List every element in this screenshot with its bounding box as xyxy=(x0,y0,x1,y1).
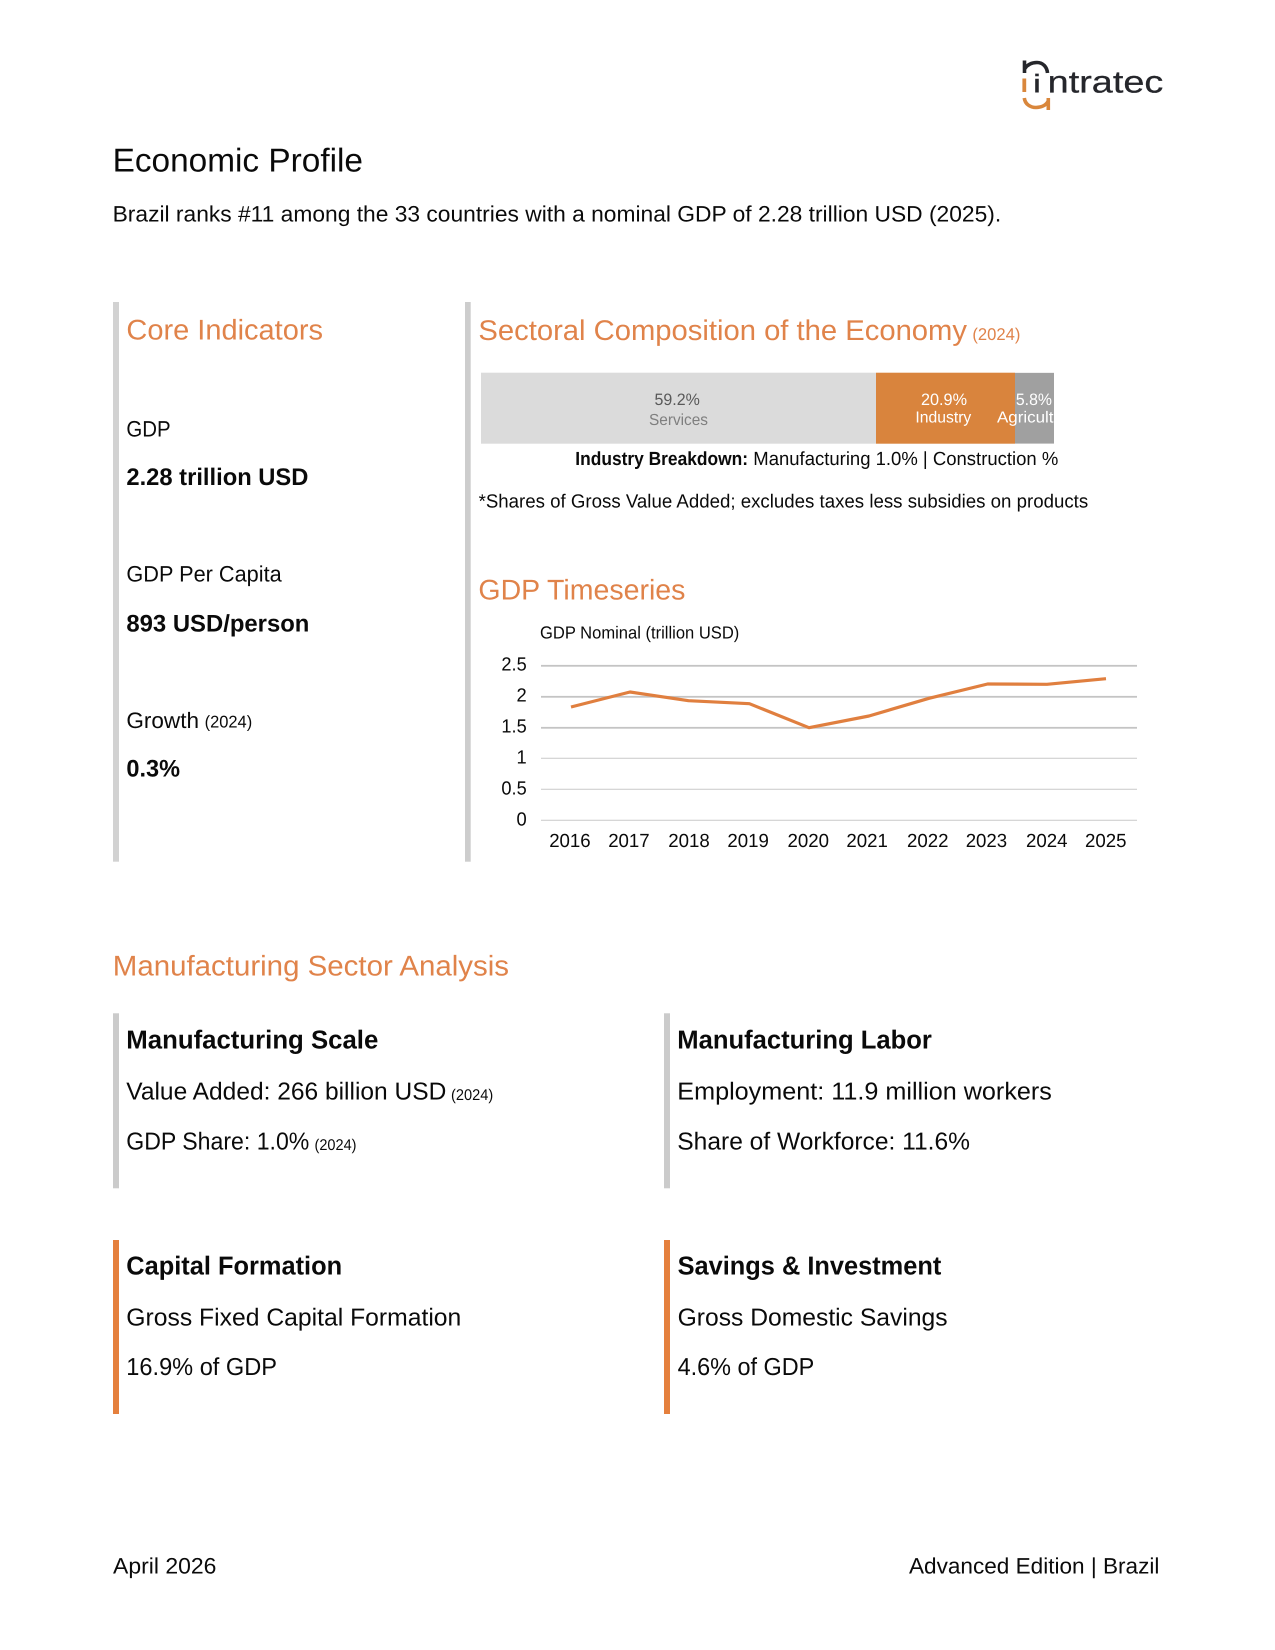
panel: manufacturing scale xyxy=(113,1013,493,1188)
y axis labels xyxy=(501,654,527,831)
segment: services: 59.2% xyxy=(654,391,700,409)
indicator: growth: Growth xyxy=(126,708,199,733)
indicator: GDP per capita: GDP Per Capita xyxy=(126,562,282,586)
panel: capital formation: 16.9% of GDP xyxy=(126,1354,277,1381)
heading: manufacturing sector analysis: Manufacturing Sector Analysis xyxy=(113,951,509,983)
logo: intratec: i xyxy=(1033,68,1041,98)
y axis labels: 0 xyxy=(516,810,527,831)
segment: agriculture: 5.8% xyxy=(1016,391,1052,409)
y axis labels: 0.5 xyxy=(501,778,527,799)
x axis labels xyxy=(549,831,1126,852)
heading: sectoral composition: Sectoral Composition of the Economy xyxy=(478,315,968,347)
heading: GDP timeseries: GDP Timeseries xyxy=(478,574,685,606)
y axis labels: 1.5 xyxy=(501,717,527,738)
industry breakdown text: Industry Breakdown: xyxy=(575,449,748,470)
panel: savings and investment: 4.6% of GDP xyxy=(678,1354,814,1381)
x axis labels: 2016 xyxy=(549,831,591,852)
panel: capital formation xyxy=(113,1240,461,1414)
panel: right column divider xyxy=(465,302,471,862)
segment: services: Services xyxy=(649,412,708,429)
industry breakdown text xyxy=(575,449,1058,470)
panel: manufacturing labor: Employment: 11.9 million workers xyxy=(677,1078,1052,1105)
x axis labels: 2020 xyxy=(788,831,829,852)
y axis labels: 1 xyxy=(516,747,527,768)
segment: industry: Industry xyxy=(915,410,971,427)
panel: manufacturing labor: Share of Workforce: 11.6% xyxy=(677,1129,970,1156)
panel: capital formation: Gross Fixed Capital Formation xyxy=(126,1304,461,1331)
segment: industry xyxy=(876,373,1015,444)
y axis labels: 2 xyxy=(516,686,527,707)
segment: industry: 20.9% xyxy=(921,391,967,409)
segment: agriculture xyxy=(997,372,1054,444)
indicator: GDP: 2.28 trillion USD xyxy=(126,464,308,491)
title: Economic Profile xyxy=(113,142,363,179)
panel: manufacturing scale: (2024) xyxy=(314,1137,356,1154)
panel: savings and investment xyxy=(664,1240,948,1414)
logo: intratec: ntratec xyxy=(1048,64,1163,99)
indicator: GDP xyxy=(126,416,308,491)
indicator: GDP per capita: 893 USD/person xyxy=(126,611,309,638)
panel: manufacturing labor xyxy=(664,1013,1052,1188)
stacked bar: sector shares xyxy=(481,373,1078,444)
panel: manufacturing scale: GDP Share: 1.0% xyxy=(126,1129,309,1156)
indicator: growth xyxy=(126,708,252,783)
industry breakdown text: Manufacturing 1.0% | Construction % xyxy=(753,449,1058,470)
footer: edition: Advanced Edition | Brazil xyxy=(909,1554,1159,1579)
footer: date: April 2026 xyxy=(113,1554,216,1579)
panel: core indicators xyxy=(113,302,323,862)
panel: savings and investment: Gross Domestic Savings xyxy=(678,1304,948,1331)
GDP line xyxy=(571,679,1106,728)
line chart: GDP nominal xyxy=(501,623,1137,852)
panel: capital formation: Capital Formation xyxy=(126,1250,342,1280)
x axis labels: 2022 xyxy=(907,831,948,852)
logo: intratec xyxy=(1022,60,1163,110)
panel: manufacturing scale: (2024) xyxy=(451,1087,493,1104)
x axis labels: 2024 xyxy=(1026,831,1068,852)
footnote: *Shares of Gross Value Added; excludes taxes less subsidies on products xyxy=(479,491,1088,512)
x axis labels: 2023 xyxy=(966,831,1007,852)
indicator: growth: 0.3% xyxy=(126,756,180,783)
x axis labels: 2018 xyxy=(668,831,710,852)
indicator: GDP: GDP xyxy=(126,416,171,442)
panel: manufacturing scale: Value Added: 266 billion USD xyxy=(126,1078,446,1105)
x axis labels: 2021 xyxy=(846,831,888,852)
panel: savings and investment: Savings & Investment xyxy=(678,1250,942,1280)
segment: agriculture: Agriculture xyxy=(997,410,1078,427)
x axis labels: 2025 xyxy=(1085,831,1126,852)
x axis labels: 2019 xyxy=(727,831,769,852)
indicator: growth: (2024) xyxy=(205,713,252,732)
heading: sectoral composition: (2024) xyxy=(972,325,1020,344)
heading: core indicators: Core Indicators xyxy=(126,314,323,346)
panel: manufacturing labor: Manufacturing Labor xyxy=(677,1024,932,1054)
indicator: GDP per capita xyxy=(126,562,309,638)
x axis labels: 2017 xyxy=(608,831,650,852)
chart title: GDP Nominal (trillion USD) xyxy=(540,623,739,643)
segment: services xyxy=(481,373,876,444)
y axis labels: 2.5 xyxy=(501,654,527,675)
intro text: Brazil ranks #11 among the 33 countries with a nominal GDP of 2.28 trillion USD (2025). xyxy=(113,201,1001,226)
panel: manufacturing scale: Manufacturing Scale xyxy=(126,1024,378,1054)
